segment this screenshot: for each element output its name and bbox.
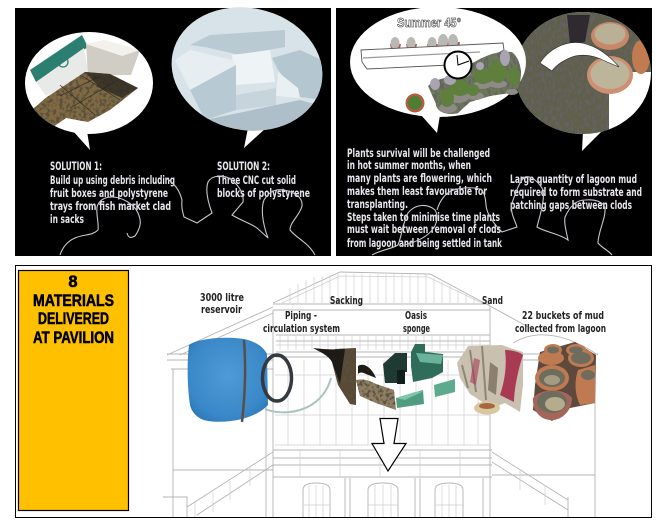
speech bubble: lagoon grass and buckets photo <box>510 8 652 151</box>
labels: materials: sponge <box>403 322 430 335</box>
panel: materials delivered at pavilion <box>16 266 652 518</box>
text: solution 1: in sacks <box>50 212 84 226</box>
text: plant survival <box>347 146 503 250</box>
text: plant survival: must wait between removal of clods <box>347 222 501 236</box>
title text: AT PAVILION <box>33 329 114 347</box>
text: plant survival: Steps taken to minimise time plants <box>347 210 500 224</box>
labels: materials: Sand <box>482 294 503 307</box>
icon: buckets of mud <box>533 342 596 421</box>
title text: MATERIALS <box>33 292 114 310</box>
text: plant survival: from lagoon and being settled in tank <box>347 236 503 250</box>
text: solution 1: trays from fish market clad <box>50 199 171 213</box>
labels: materials: reservoir <box>201 303 242 316</box>
icon: planter tank <box>361 43 504 69</box>
text: solution 1 <box>50 159 175 226</box>
title text: DELIVERED <box>38 310 109 328</box>
speech bubble: summer heat and plants <box>350 7 526 133</box>
text: solution 1: SOLUTION 1: <box>50 159 102 173</box>
speech bubble: debris photo <box>25 32 153 150</box>
icon: sand bags <box>457 345 523 414</box>
heading: summer 45: Summer 45° <box>397 15 461 30</box>
text: solution 2 <box>217 159 310 200</box>
icon: small potted plants on shelf <box>390 34 460 49</box>
labels: materials: collected from lagoon <box>515 322 606 335</box>
speech bubble: polystyrene blocks photo <box>172 7 322 148</box>
drawing: pavilion elevation <box>163 272 598 517</box>
icon: sacking <box>313 348 396 410</box>
arrow: curved white <box>540 42 619 71</box>
labels: materials: 22 buckets of mud <box>522 309 604 322</box>
text: plant survival: Plants survival will be challenged <box>347 146 490 160</box>
plants in clods <box>406 50 521 114</box>
text: plant survival: many plants are flowering, which <box>347 171 492 185</box>
audience head outlines <box>60 176 315 255</box>
text: solution 2: SOLUTION 2: <box>217 159 270 173</box>
text: lagoon mud <box>510 172 642 212</box>
panel: plant survival and lagoon mud <box>336 7 652 256</box>
labels: materials: Piping - <box>285 309 317 322</box>
icon: blue water reservoir <box>188 338 268 422</box>
icon: clock <box>444 52 472 78</box>
labels: materials <box>200 291 606 335</box>
audience head outlines <box>372 177 612 255</box>
text: solution 2: blocks of polystyrene <box>217 186 310 200</box>
text: solution 2: Three CNC cut solid <box>217 173 296 187</box>
panel: yellow title box <box>18 270 128 510</box>
title text: 8 <box>68 273 78 291</box>
icon: piping coil and hose <box>262 355 331 412</box>
icon: oasis sponge blocks <box>383 344 455 408</box>
panel: solutions for building up clods <box>15 0 334 256</box>
labels: materials: circulation system <box>263 322 340 335</box>
labels: materials: Oasis <box>405 309 427 322</box>
text: plant survival: makes them least favourable for <box>347 184 488 198</box>
arrow: down <box>372 418 406 471</box>
text: solution 1: fruit boxes and polystyrene <box>50 186 168 200</box>
labels: materials: Sacking <box>330 294 363 307</box>
title text <box>33 273 114 347</box>
labels: materials: 3000 litre <box>200 291 244 304</box>
text: plant survival: transplanting. <box>347 197 408 211</box>
text: solution 1: Build up using debris including <box>50 173 175 187</box>
text: plant survival: in hot summer months, when <box>347 158 471 172</box>
